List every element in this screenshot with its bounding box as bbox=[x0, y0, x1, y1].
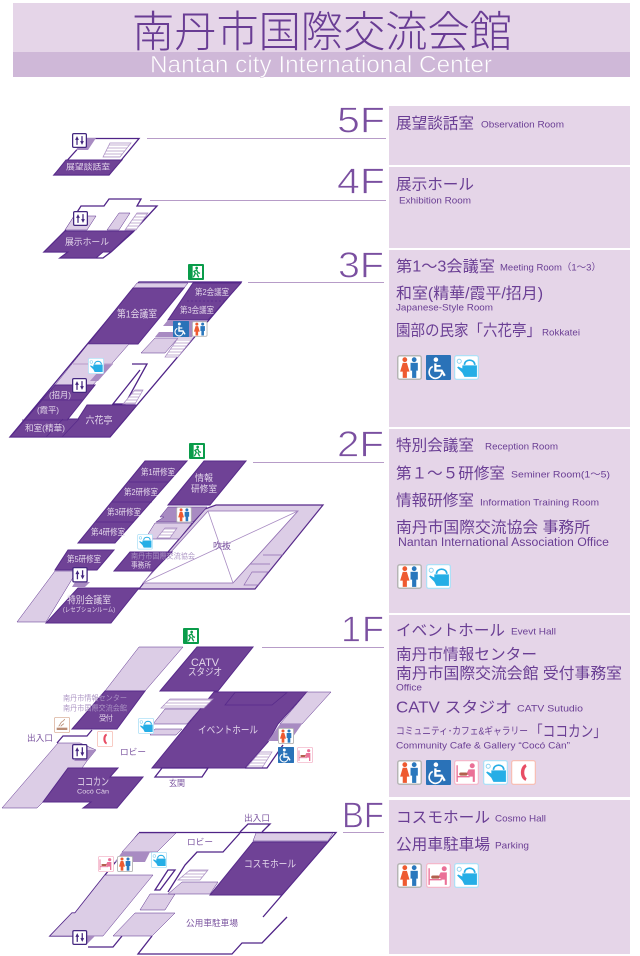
room: 第1会議室 bbox=[88, 288, 184, 344]
room: CATV studio bbox=[160, 647, 253, 691]
rooms: 第1-第4研修室: 第1研修室 bbox=[141, 467, 175, 477]
atrium bbox=[139, 505, 323, 589]
panel: BF rooms: Cosmo Hall bbox=[495, 814, 546, 824]
floor label 1F bbox=[262, 608, 384, 650]
panel: 1F rooms: Community Cafe & Gallery “Cocó Càn” bbox=[396, 740, 570, 752]
rooms: 第2 第3会議室: 第3会議室 bbox=[180, 305, 214, 315]
rooms: 第1-第4研修室: 第4研修室 bbox=[91, 527, 125, 537]
panel: 1F rooms: Evevt Hall bbox=[511, 626, 556, 638]
icons: BF facilities bbox=[398, 864, 478, 887]
panel: 2F rooms: 特別会議室 bbox=[396, 436, 474, 454]
panel: 2F rooms: 南丹市国際交流協会 事務所 bbox=[396, 518, 590, 536]
panel: 3F rooms: Japanese-Style Room bbox=[396, 302, 493, 314]
labels: 1F circulation: ロビー bbox=[120, 747, 146, 757]
floor label 1F: 1F bbox=[341, 608, 384, 650]
icons: 3F facilities bbox=[398, 355, 478, 380]
panel: 1F rooms: CATV Sutudio bbox=[517, 704, 583, 714]
icon: toilet bbox=[192, 322, 207, 336]
labels: BF areas bbox=[186, 813, 270, 928]
floor plan 1F bbox=[2, 628, 331, 808]
floor plan 5F bbox=[54, 134, 139, 175]
panel: 3F rooms: Meeting Room（1～3） bbox=[500, 262, 601, 274]
panel: 2F rooms: Information Training Room bbox=[480, 498, 599, 508]
icon: exit bbox=[188, 264, 204, 280]
floor label 2F: 2F bbox=[337, 424, 384, 464]
panel: 4F rooms: Exhibition Room bbox=[399, 196, 471, 206]
panel: 2F rooms: 情報研修室 bbox=[396, 492, 474, 510]
floor label 4F: 4F bbox=[337, 160, 385, 202]
panel: 2F rooms bbox=[389, 429, 630, 613]
icon: elevator bbox=[73, 745, 87, 759]
floor label 3F: 3F bbox=[338, 244, 384, 286]
room: 情報研修室: 情報 bbox=[195, 472, 213, 483]
icon: kettle bbox=[138, 534, 152, 549]
icon: baby care bbox=[297, 747, 313, 763]
icon: smoking bbox=[54, 717, 70, 733]
rooms: 第1-第4研修室: 第2研修室 bbox=[124, 487, 158, 497]
icon: wheelchair bbox=[278, 747, 294, 763]
panel: 5F rooms: Observation Room bbox=[481, 120, 564, 130]
panel: 1F rooms: 「ココカン」 bbox=[530, 722, 606, 740]
floor plan BF bbox=[50, 813, 336, 954]
icon: baby care bbox=[98, 856, 114, 872]
labels: 1F circulation: 玄関 bbox=[169, 778, 185, 788]
room: 第5研修室 bbox=[55, 550, 114, 570]
panel: 2F rooms: Seminer Room(1～5) bbox=[511, 470, 610, 480]
rooms: 和室 and 六花亭: 和室(精華) bbox=[25, 423, 65, 433]
room: ココカン: Cocó Càn bbox=[77, 788, 109, 796]
subtitle band: Nantan city International Center bbox=[150, 52, 492, 78]
icon: kettle bbox=[138, 718, 154, 734]
room: 協会事務所 bbox=[114, 550, 195, 571]
panel: 3F rooms: 第1～3会議室 bbox=[396, 258, 495, 276]
atrium: 吹抜 bbox=[213, 540, 231, 551]
rooms: 和室 and 六花亭: 六花亭 bbox=[86, 414, 112, 426]
labels: BF areas: 出入口 bbox=[244, 813, 270, 823]
labels: BF areas: 公用車駐車場 bbox=[186, 918, 238, 928]
room: 特別会議室: (レセプションルーム) bbox=[63, 606, 115, 614]
room: ココカン bbox=[43, 768, 143, 808]
icon: elevator bbox=[73, 379, 86, 392]
panel: BF rooms: コスモホール bbox=[396, 810, 490, 826]
room: information centre: 南丹市情報センター bbox=[63, 692, 127, 702]
panel: 1F rooms bbox=[389, 615, 630, 797]
icon: toilet bbox=[177, 507, 191, 522]
panel: 1F rooms: 南丹市情報センター bbox=[396, 646, 537, 664]
room: information centre bbox=[63, 691, 145, 729]
rooms: 第2 第3会議室: 第2会議室 bbox=[195, 287, 229, 297]
room: event hall: イベントホール bbox=[198, 724, 258, 736]
subtitle band bbox=[13, 52, 630, 78]
panel: 5F rooms: 展望談話室 bbox=[396, 114, 474, 132]
room: CATV studio: スタジオ bbox=[188, 666, 222, 678]
room: コスモホール: コスモホール bbox=[244, 858, 296, 870]
title header band bbox=[13, 3, 630, 57]
panel: BF rooms: 公用車駐車場 bbox=[396, 836, 490, 854]
rooms: 和室 and 六花亭 bbox=[10, 385, 137, 437]
icon: elevator bbox=[73, 568, 87, 582]
icons: 1F facilities bbox=[398, 760, 535, 785]
room: information centre: 南丹市国際交流会館 bbox=[63, 702, 127, 712]
panel: 3F rooms bbox=[389, 250, 630, 427]
room: 情報研修室: 研修室 bbox=[191, 483, 217, 494]
panel: 2F rooms: Reception Room bbox=[485, 442, 558, 452]
icons: 2F facilities bbox=[398, 565, 450, 588]
panel: 3F rooms: Rokkatei bbox=[542, 328, 580, 338]
room: 協会事務所: 南丹市国際交流協会 bbox=[131, 550, 195, 560]
room: information centre: 受付 bbox=[99, 712, 114, 722]
panel: 1F rooms: 南丹市国際交流会館 受付事務室 bbox=[396, 664, 622, 682]
floor plan 4F: 展示ホール bbox=[65, 237, 109, 247]
room: 協会事務所: 事務所 bbox=[131, 560, 151, 570]
icon: elevator bbox=[73, 134, 86, 147]
icon: wheelchair bbox=[173, 321, 189, 337]
room: 情報研修室 bbox=[168, 461, 246, 505]
icon: toilet bbox=[117, 856, 133, 872]
floor label 3F bbox=[248, 244, 384, 286]
panel: BF rooms: Parking bbox=[495, 840, 529, 852]
room: 第1会議室: 第1会議室 bbox=[117, 308, 157, 320]
floor label 5F: 5F bbox=[337, 100, 385, 140]
panel: 3F rooms: 園部の民家「六花亭」 bbox=[396, 322, 541, 340]
panel: 4F rooms: 展示ホール bbox=[396, 176, 474, 194]
floor plan 2F bbox=[17, 443, 323, 623]
room: 特別会議室 bbox=[46, 588, 139, 623]
panel: 4F rooms bbox=[389, 167, 630, 248]
panel: 1F rooms: Office bbox=[396, 682, 422, 694]
room: CATV studio: CATV bbox=[191, 657, 220, 669]
rooms: 和室 and 六花亭: (霞平) bbox=[37, 405, 59, 415]
panel: 2F rooms: 第１～５研修室 bbox=[396, 464, 505, 482]
icon: exit bbox=[183, 628, 199, 644]
icon: kettle bbox=[88, 358, 104, 374]
rooms: 第2 第3会議室 bbox=[168, 283, 241, 320]
icon: kettle bbox=[151, 852, 167, 868]
title: 南丹市国際交流会館 bbox=[132, 9, 512, 57]
floor label BF: BF bbox=[342, 794, 384, 836]
rooms: 和室 and 六花亭: (招月) bbox=[49, 390, 71, 400]
panel: 5F rooms bbox=[389, 106, 630, 165]
icon: elevator bbox=[73, 931, 87, 944]
labels: BF areas: ロビー bbox=[187, 837, 213, 847]
panel: 2F rooms: Nantan International Association Office bbox=[398, 537, 609, 549]
room: 特別会議室: 特別会議室 bbox=[67, 594, 111, 606]
floor plan 4F bbox=[44, 199, 157, 258]
panel: 1F rooms: CATV スタジオ bbox=[396, 698, 512, 716]
room: コスモホール bbox=[210, 842, 328, 895]
room: lobby lavender west bbox=[2, 743, 96, 808]
room: ココカン: ココカン bbox=[77, 776, 109, 788]
panel: 1F rooms: イベントホール bbox=[396, 622, 505, 640]
rooms: 第1-第4研修室: 第3研修室 bbox=[107, 507, 141, 517]
icon: elevator bbox=[74, 212, 87, 225]
labels: 1F circulation bbox=[27, 733, 185, 788]
floor label 2F bbox=[253, 424, 384, 464]
icon: toilet bbox=[278, 728, 294, 744]
room: event hall bbox=[152, 692, 307, 768]
floor plan 3F bbox=[10, 264, 241, 437]
room: 第5研修室: 第5研修室 bbox=[67, 554, 101, 564]
icon: exit bbox=[189, 443, 205, 459]
panel: BF rooms bbox=[389, 800, 630, 954]
labels: 1F circulation: 出入口 bbox=[27, 733, 53, 743]
floor plan 5F: 展望談話室 bbox=[66, 162, 110, 172]
icon: phone bbox=[97, 731, 113, 747]
rooms: 第1-第4研修室 bbox=[78, 461, 187, 543]
panel: 3F rooms: 和室(精華/霞平/招月) bbox=[396, 284, 543, 302]
panel: 1F rooms: コミュニティ･カフェ&ギャラリー bbox=[396, 726, 528, 738]
